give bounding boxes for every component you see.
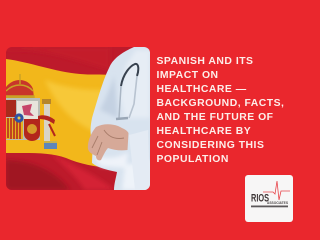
pillar	[44, 103, 50, 141]
title text block: BACKGROUND, FACTS,	[156, 98, 284, 109]
title text block: IMPACT ON	[156, 70, 219, 81]
title text block	[156, 56, 284, 165]
flag: red field	[6, 47, 150, 190]
flag: dark folds	[6, 156, 112, 190]
title text block: AND THE FUTURE OF	[156, 112, 274, 123]
title text block: HEALTHCARE BY	[156, 126, 251, 137]
flag: yellow band	[6, 59, 112, 168]
title text block: HEALTHCARE —	[156, 84, 247, 95]
logo: red heartbeat line	[263, 181, 290, 200]
doctor: clasped hands	[88, 124, 128, 160]
logo: tagline bar	[251, 206, 288, 207]
title text block: POPULATION	[156, 154, 229, 165]
crown	[6, 80, 34, 96]
title text block: SPANISH AND ITS	[156, 56, 253, 67]
logo: wordmark Associates: ASSOCIATES	[267, 201, 288, 205]
title text block: CONSIDERING THIS	[156, 140, 264, 151]
illustration and logo artwork	[6, 47, 293, 222]
photo: Spanish flag and doctor	[6, 47, 150, 190]
coat of arms	[6, 74, 57, 149]
logo: white badge	[245, 175, 293, 222]
shield	[6, 98, 40, 140]
logo: wordmark Rios: RIOS	[251, 192, 269, 204]
doctor: coat	[90, 47, 150, 190]
doctor: coat shading	[94, 50, 150, 190]
flag: yellow highlights	[46, 80, 100, 131]
doctor: cuff	[129, 130, 150, 190]
doctor: stethoscope	[116, 64, 138, 119]
doctor: finger shadow	[92, 130, 124, 155]
